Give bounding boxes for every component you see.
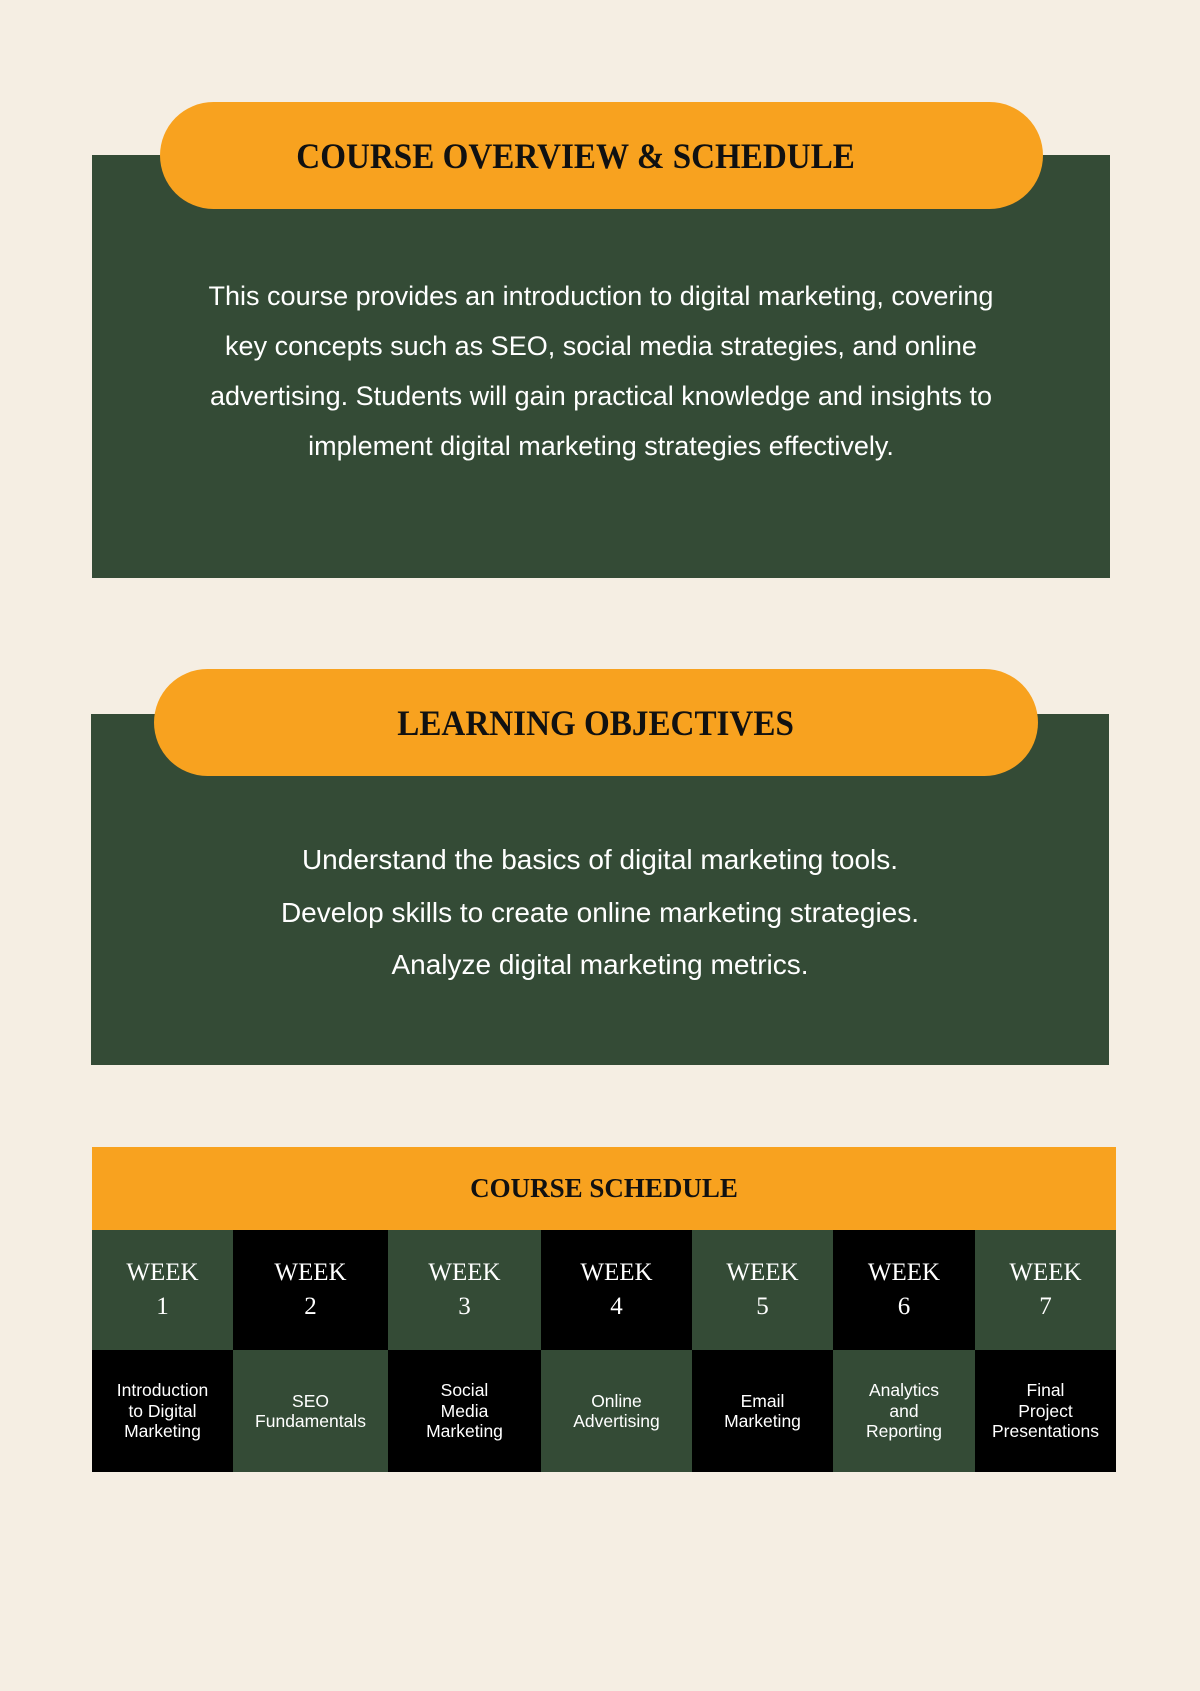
topics row: Project — [1018, 1401, 1073, 1421]
week headers row: 2 — [304, 1293, 317, 1320]
topics row — [92, 1350, 1116, 1472]
overview text: advertising. Students will gain practical knowledge and insights to — [210, 381, 992, 411]
heading: course overview & schedule — [160, 102, 1043, 209]
overview text: implement digital marketing strategies effectively. — [308, 431, 894, 461]
topics row: SEO — [292, 1390, 329, 1410]
week headers row: 3 — [458, 1293, 471, 1320]
heading: learning objectives: LEARNING OBJECTIVES — [398, 702, 794, 742]
topics row: Analytics — [869, 1380, 939, 1400]
week headers row: WEEK — [868, 1259, 940, 1286]
panel: course overview — [92, 155, 1110, 578]
topics row: Social — [441, 1380, 488, 1400]
table: course schedule — [92, 1147, 1116, 1472]
panel: learning objectives — [91, 714, 1109, 1065]
week headers row — [92, 1230, 1116, 1350]
week headers row: WEEK — [428, 1259, 501, 1286]
week headers row: WEEK — [1009, 1259, 1082, 1286]
week headers row: 7 — [1039, 1293, 1052, 1320]
topics row: to Digital — [128, 1401, 197, 1421]
schedule header: COURSE SCHEDULE — [470, 1173, 738, 1203]
week headers row: WEEK — [726, 1259, 799, 1286]
objectives list: Understand the basics of digital marketing tools. — [302, 844, 898, 875]
topics row: Presentations — [992, 1421, 1099, 1441]
topics row: Reporting — [866, 1421, 942, 1441]
objectives list: Analyze digital marketing metrics. — [391, 949, 809, 980]
week headers row: WEEK — [126, 1259, 199, 1286]
topics row: Marketing — [426, 1421, 503, 1441]
topics row: Fundamentals — [255, 1411, 366, 1431]
topics row: and — [889, 1401, 919, 1421]
topics row: Marketing — [724, 1411, 801, 1431]
topics row: Final — [1027, 1380, 1064, 1400]
week headers row: 5 — [756, 1293, 769, 1320]
objectives list — [281, 844, 919, 980]
week headers row: 6 — [898, 1293, 910, 1320]
week headers row: WEEK — [274, 1259, 347, 1286]
heading: course overview & schedule: COURSE OVERVIEW & SCHEDULE — [296, 136, 855, 176]
overview text: This course provides an introduction to digital marketing, covering — [209, 281, 993, 311]
topics row: Media — [441, 1401, 488, 1421]
week headers row: 1 — [156, 1293, 169, 1320]
objectives list: Develop skills to create online marketing strategies. — [281, 896, 919, 928]
week headers row: 4 — [610, 1293, 623, 1320]
week headers row: WEEK — [580, 1259, 653, 1286]
topics row: Online — [591, 1390, 642, 1410]
schedule header — [92, 1147, 1116, 1230]
topics row: Marketing — [124, 1421, 201, 1441]
overview text: key concepts such as SEO, social media strategies, and online — [225, 331, 977, 361]
topics row: Email — [741, 1390, 784, 1410]
heading: learning objectives — [154, 669, 1038, 776]
overview text — [209, 281, 993, 461]
topics row: Introduction — [117, 1380, 208, 1400]
topics row: Advertising — [573, 1411, 660, 1431]
